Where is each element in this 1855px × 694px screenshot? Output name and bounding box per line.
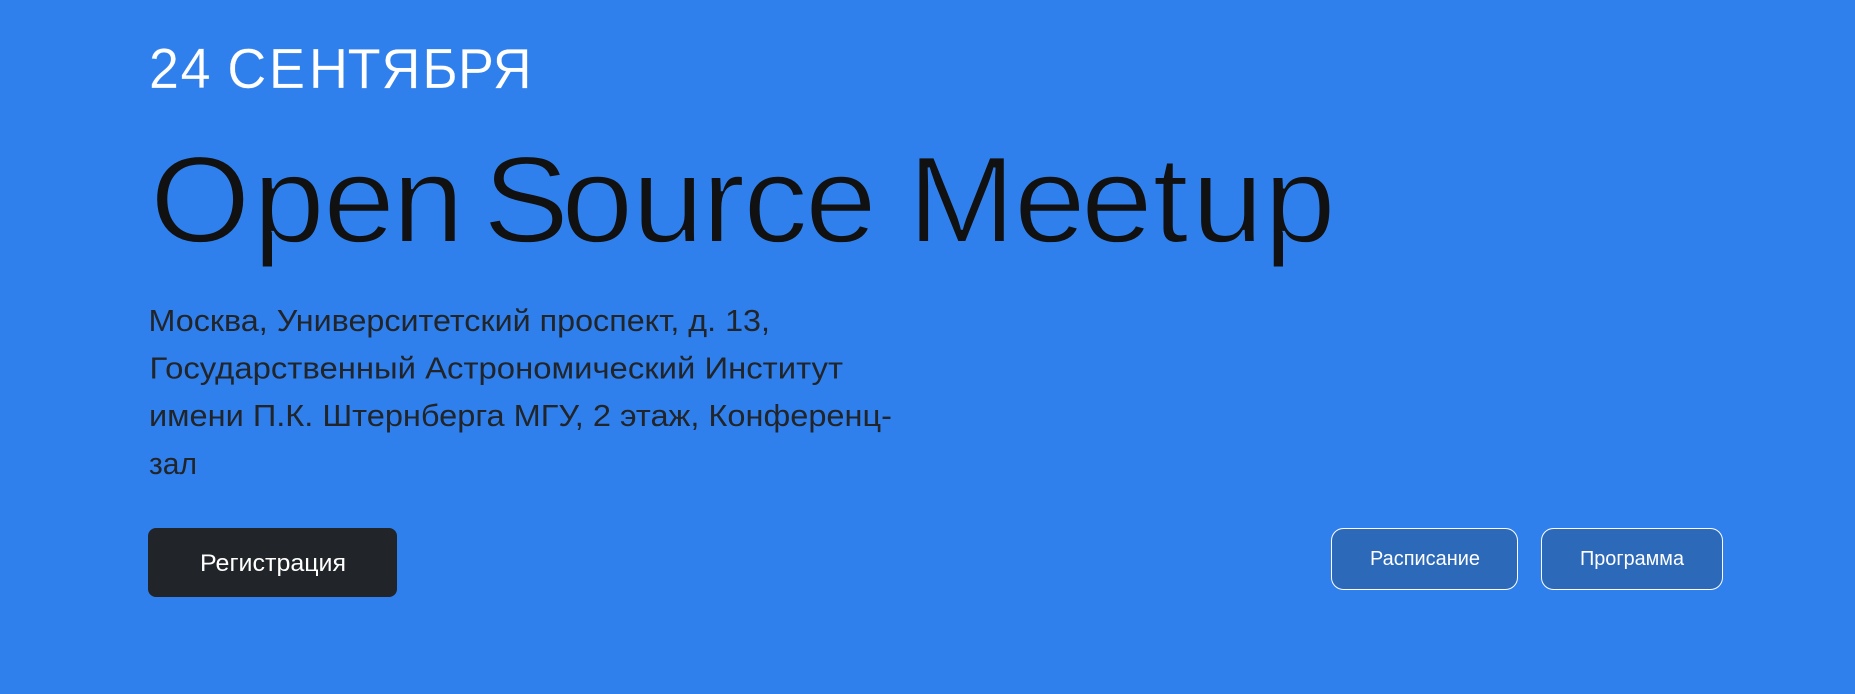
venue address: Государственный Астрономический Институт bbox=[150, 350, 843, 386]
schedule button: Расписание bbox=[1370, 548, 1480, 570]
venue address: Москва, Университетский проспект, д. 13, bbox=[148, 303, 770, 338]
registration button: Регистрация bbox=[200, 550, 346, 577]
venue address bbox=[148, 303, 892, 481]
title: Open Source Meetup bbox=[150, 131, 1336, 268]
program button: Программа bbox=[1580, 548, 1685, 570]
venue address: зал bbox=[149, 446, 197, 481]
schedule button bbox=[1332, 528, 1518, 590]
registration button bbox=[148, 528, 397, 597]
venue address: имени П.К. Штернберга МГУ, 2 этаж, Конференц- bbox=[149, 398, 892, 433]
date heading: 24 СЕНТЯБРЯ bbox=[149, 37, 532, 100]
program button bbox=[1542, 528, 1722, 590]
